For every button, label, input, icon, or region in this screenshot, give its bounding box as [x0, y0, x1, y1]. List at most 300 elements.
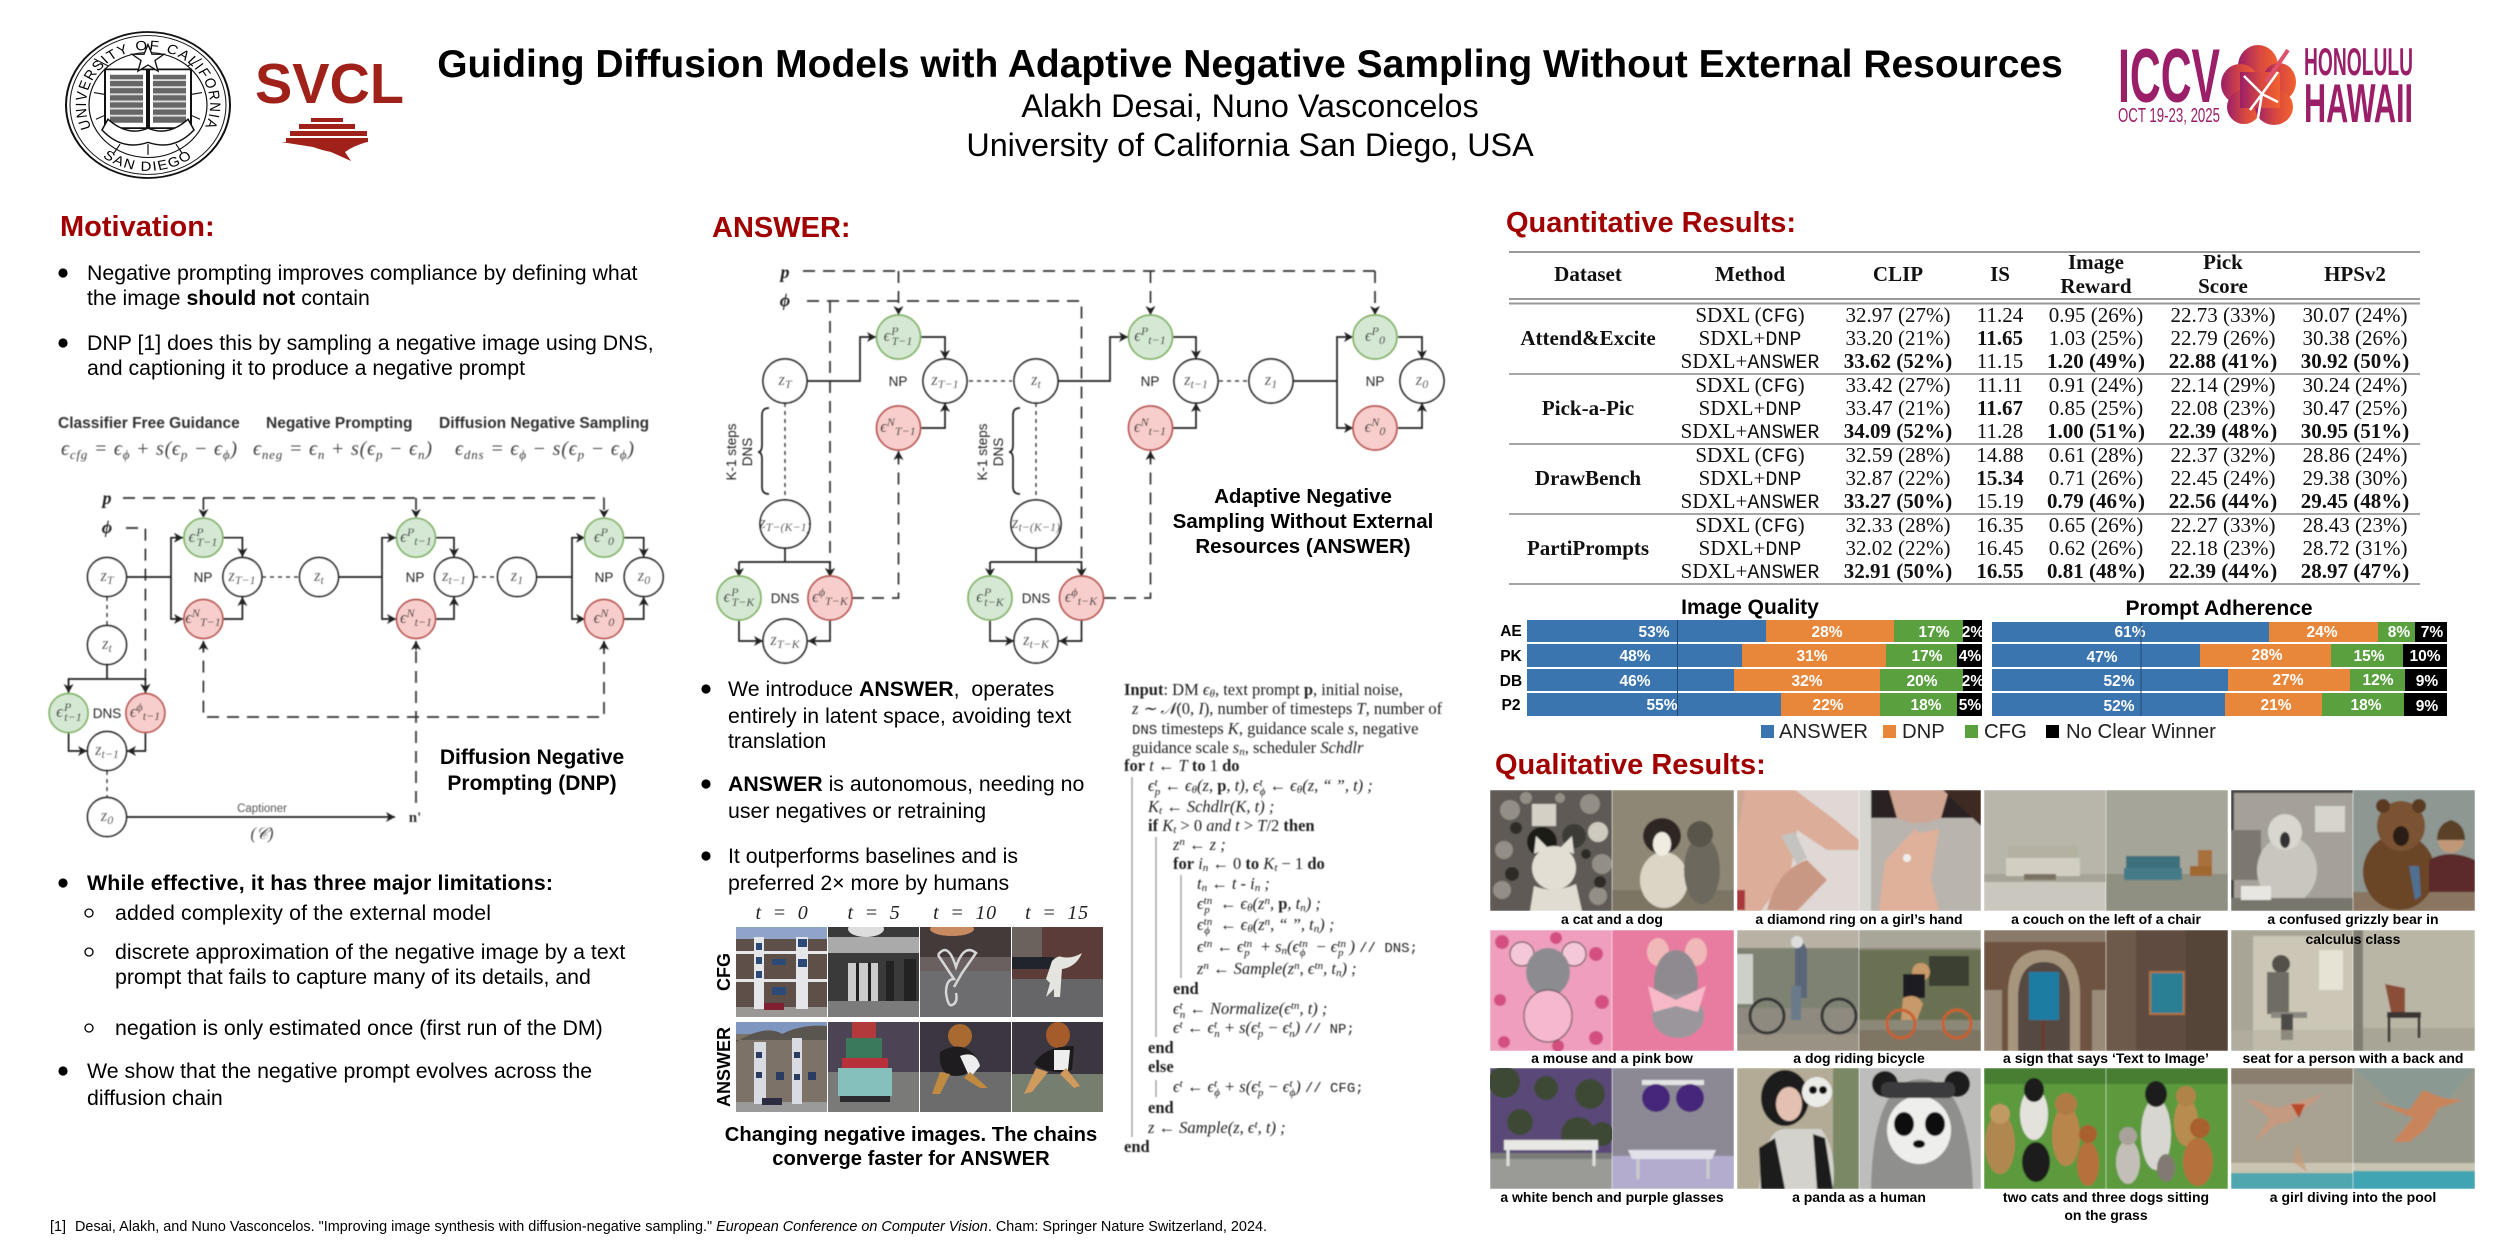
equations: guidance formulas: Classifier Free Guidance	[58, 415, 240, 432]
table group: Attend&Excite: 22.73 (33%)	[2171, 303, 2275, 327]
algorithm: ANSWER pseudocode: ϕ	[1204, 925, 1210, 937]
table header: Method	[1715, 262, 1785, 286]
row PK: 10%	[2409, 648, 2441, 665]
heading: Motivation: Motivation:	[60, 211, 215, 243]
diagram: ANSWER chain: z	[1031, 370, 1038, 389]
algorithm: ANSWER pseudocode: z	[1197, 959, 1203, 978]
text block: limitations bullets: We show that the negative prompt evolves across the	[87, 1059, 592, 1083]
diagram: ANSWER chain: DNS	[1022, 591, 1050, 606]
diagram: Diffusion Negative Prompting: P	[63, 700, 72, 714]
captions: qualitative images: a diamond ring on a girl’s hand	[1755, 911, 1963, 927]
algorithm: ANSWER pseudocode: end	[1148, 1098, 1174, 1117]
algorithm: ANSWER pseudocode: > 0	[1176, 816, 1206, 835]
row P2: 21%	[2260, 697, 2292, 714]
algorithm: ANSWER pseudocode: t	[1274, 862, 1278, 874]
table header: IS	[1990, 262, 2010, 286]
algorithm: ANSWER pseudocode: n	[1336, 967, 1342, 979]
algorithm: ANSWER pseudocode: θ	[1210, 688, 1216, 700]
diagram: Diffusion Negative Prompting: ϵ	[185, 608, 192, 627]
text block: ANSWER bullets: user negatives or retraining	[728, 799, 986, 823]
algorithm: ANSWER pseudocode: ϕ	[1300, 947, 1306, 959]
diagram: Diffusion Negative Prompting: ϵ	[130, 702, 136, 721]
table group: DrawBench: 15.34	[1976, 466, 2024, 490]
algorithm: ANSWER pseudocode: ← ϵ	[1216, 894, 1248, 913]
algorithm: ANSWER pseudocode	[1124, 680, 1443, 1156]
diagram: ANSWER chain: ϵ	[1365, 417, 1371, 436]
logo: UC San Diego seal: UNIVERSITY OF CALIFORNIA	[76, 40, 220, 130]
heading: Qualitative Results: Qualitative Results:	[1495, 749, 1766, 781]
table group: Attend&Excite: 22.79 (26%)	[2171, 326, 2275, 350]
algorithm: ANSWER pseudocode: (z,	[1197, 776, 1217, 795]
text block: motivation bullets top: the image should not contain	[87, 286, 370, 310]
algorithm: ANSWER pseudocode: tn	[1291, 1000, 1300, 1012]
captions: qualitative images: on the grass	[2064, 1207, 2148, 1223]
equations: guidance formulas: − ϵ	[585, 438, 620, 460]
text block: ANSWER bullets: ANSWER is autonomous, needing no	[728, 772, 1084, 796]
table group: PartiPrompts: 0.62 (26%)	[2049, 536, 2143, 560]
algorithm: ANSWER pseudocode: ϵ	[1197, 915, 1204, 934]
equations: guidance formulas: cfg	[70, 447, 88, 462]
text block: motivation bullets top: and captioning it to produce a negative prompt	[87, 356, 525, 380]
table group: PartiPrompts	[1527, 513, 2409, 585]
algorithm: ANSWER pseudocode: , t) ;	[1258, 1118, 1286, 1137]
algorithm: ANSWER pseudocode: t	[1258, 1078, 1262, 1090]
table group: Attend&Excite: 11.24	[1977, 303, 2024, 327]
algorithm: ANSWER pseudocode: ← 0	[1208, 854, 1245, 873]
algorithm: ANSWER pseudocode: n	[1179, 836, 1185, 848]
text block: ANSWER bullets: It outperforms baselines and is	[728, 844, 1018, 868]
row DB: 20%	[1906, 673, 1938, 690]
icon: SVCL ship	[281, 118, 368, 161]
algorithm: ANSWER pseudocode: z ← Sample(z, ϵ	[1148, 1118, 1255, 1137]
algorithm: ANSWER pseudocode: ← Normalize(ϵ	[1185, 999, 1292, 1018]
table group: Attend&Excite: SDXL (CFG)	[1695, 303, 1805, 329]
diagram: Diffusion Negative Prompting: t	[109, 641, 113, 655]
captions: qualitative images	[1500, 911, 2463, 1223]
text block: limitations bullets: diffusion chain	[87, 1086, 223, 1110]
legend: No Clear Winner	[2066, 721, 2216, 743]
table group: PartiPrompts: 16.55	[1976, 559, 2024, 583]
table group: Pick-a-Pic: 22.14 (29%)	[2171, 373, 2275, 397]
table group: PartiPrompts: PartiPrompts	[1527, 536, 1649, 560]
algorithm: ANSWER pseudocode: − ϵ	[1311, 937, 1339, 956]
row P2: 9%	[2416, 698, 2438, 715]
logo: ICCV Honolulu Hawaii: HAWAII	[2304, 72, 2413, 134]
image: CFG t=10	[920, 927, 1011, 1017]
algorithm: ANSWER pseudocode: tn	[1244, 938, 1253, 950]
table group: Pick-a-Pic: 30.47 (25%)	[2303, 396, 2407, 420]
algorithm: ANSWER pseudocode: p	[1203, 904, 1210, 916]
text block: limitations bullets	[58, 871, 625, 1110]
row P2: 55%	[1646, 697, 1678, 714]
diagram: ANSWER chain: P	[890, 324, 899, 338]
algorithm: ANSWER pseudocode: (ϵ	[1287, 937, 1300, 956]
equations: guidance formulas: + s(ϵ	[130, 438, 181, 460]
algorithm: ANSWER pseudocode: t	[1214, 1019, 1218, 1031]
table group: PartiPrompts: 22.18 (23%)	[2171, 536, 2275, 560]
algorithm: ANSWER pseudocode: , t) ;	[1299, 999, 1327, 1018]
algorithm: ANSWER pseudocode: tn	[1204, 916, 1213, 928]
diagram: Diffusion Negative Prompting: t−1	[448, 573, 466, 587]
algorithm: ANSWER pseudocode: n	[1203, 960, 1209, 972]
table group: DrawBench: SDXL+DNP	[1699, 466, 1801, 492]
algorithm: ANSWER pseudocode: tn	[1315, 960, 1324, 972]
algorithm: ANSWER pseudocode: // DNS;	[1359, 941, 1418, 957]
table group: DrawBench: SDXL+ANSWER	[1681, 489, 1819, 515]
algorithm: ANSWER pseudocode: n	[1202, 882, 1208, 894]
algorithm: ANSWER pseudocode: t	[1173, 824, 1177, 836]
labels: timesteps	[755, 902, 1089, 924]
diagram: ANSWER chain: P	[1371, 324, 1380, 338]
row AE: 53%	[1638, 624, 1670, 641]
algorithm: ANSWER pseudocode: n	[1203, 862, 1209, 874]
diagram: ANSWER chain: NP	[889, 374, 907, 389]
heading: Quantitative Results: Quantitative Results:	[1506, 207, 1796, 239]
equations: guidance formulas: dns	[464, 447, 484, 462]
row AE	[1527, 620, 1984, 642]
text block: motivation bullets top: Negative prompting improves compliance by defining what	[87, 261, 638, 285]
algorithm: ANSWER pseudocode: t	[1180, 1019, 1184, 1031]
image: a cat and a dog	[1490, 790, 1734, 911]
table group: Attend&Excite: 0.95 (26%)	[2049, 303, 2143, 327]
equations: guidance formulas	[58, 415, 649, 462]
table group: PartiPrompts: 32.33 (28%)	[1846, 513, 1950, 537]
row PK	[1992, 644, 2447, 667]
diagram: ANSWER chain: 0	[1379, 333, 1385, 347]
diagram: ANSWER chain: N	[1140, 415, 1150, 429]
equations: guidance formulas: − ϵ	[383, 438, 418, 460]
table group: PartiPrompts: 28.72 (31%)	[2303, 536, 2407, 560]
table group: PartiPrompts: 28.43 (23%)	[2303, 513, 2407, 537]
logo: ICCV Honolulu Hawaii	[2118, 34, 2413, 134]
diagram: ANSWER chain: z	[1012, 513, 1018, 532]
image: seat for a person with a back and	[2231, 930, 2475, 1051]
image: a girl diving into the pool	[2231, 1068, 2475, 1189]
table group: DrawBench: SDXL (CFG)	[1695, 443, 1805, 469]
algorithm: ANSWER pseudocode: end	[1124, 1137, 1150, 1156]
algorithm: ANSWER pseudocode: Schdlr	[1320, 738, 1364, 757]
image: a confused grizzly bear in calculus class	[2231, 790, 2475, 911]
diagram: Diffusion Negative Prompting: ϵ	[400, 608, 407, 627]
algorithm: ANSWER pseudocode: p	[1257, 1028, 1264, 1040]
row DB: 32%	[1791, 673, 1823, 690]
text block: limitations bullets: negation is only estimated once (first run of the DM)	[115, 1016, 603, 1040]
algorithm: ANSWER pseudocode: θ	[1247, 902, 1253, 914]
algorithm: ANSWER pseudocode: − 1	[1277, 854, 1307, 873]
diagram: Diffusion Negative Prompting: NP	[406, 570, 424, 585]
table group: PartiPrompts: 22.39 (44%)	[2169, 559, 2277, 583]
diagram: ANSWER chain: z	[1023, 630, 1029, 649]
diagram: Diffusion Negative Prompting: 0	[644, 573, 650, 587]
table group: DrawBench: 22.37 (32%)	[2171, 443, 2275, 467]
row PK: 31%	[1796, 648, 1828, 665]
diagram: ANSWER chain: t−1	[1149, 424, 1166, 438]
equations: guidance formulas: ϕ	[123, 447, 130, 462]
row AE: 24%	[2306, 624, 2338, 641]
diagram: Diffusion Negative Prompting: P	[600, 525, 609, 539]
row AE: 2%	[1962, 624, 1984, 641]
row AE: 17%	[1918, 624, 1950, 641]
algorithm: ANSWER pseudocode: , “ ”, t	[1270, 915, 1314, 934]
chart: Prompt Adherence stacked bars	[1992, 597, 2447, 716]
algorithm: ANSWER pseudocode: n	[1300, 902, 1306, 914]
diagram: ANSWER chain: DNS	[991, 438, 1006, 466]
diagram: Diffusion Negative Prompting: t−1	[415, 615, 432, 629]
table group: DrawBench: 0.71 (26%)	[2049, 466, 2143, 490]
diagram: Diffusion Negative Prompting: 0	[608, 615, 614, 629]
diagram: Diffusion Negative Prompting: 1	[517, 573, 523, 587]
equations: guidance formulas: = ϵ	[484, 438, 519, 460]
table group: Pick-a-Pic: Pick-a-Pic	[1542, 396, 1634, 420]
diagram: ANSWER chain: NP	[1141, 374, 1159, 389]
icon: hibiscus flower	[2221, 45, 2296, 125]
diagram: ANSWER chain: K-1 steps	[975, 423, 990, 481]
diagram: Diffusion Negative Prompting: T−1	[197, 535, 217, 549]
equations: guidance formulas: p	[180, 447, 188, 462]
algorithm: ANSWER pseudocode: for t ← T to 1 do	[1124, 756, 1240, 775]
icon: brace right	[1009, 408, 1020, 494]
table group: DrawBench: 29.38 (30%)	[2303, 466, 2407, 490]
diagram: ANSWER chain: ϵ	[884, 326, 890, 345]
row PK: 4%	[1959, 648, 1981, 665]
logo: SVCL	[255, 52, 404, 161]
algorithm: ANSWER pseudocode: ← t - i	[1207, 874, 1255, 893]
diagram: Diffusion Negative Prompting: N	[191, 606, 201, 620]
algorithm: ANSWER pseudocode: t	[1260, 777, 1264, 789]
diagram: Diffusion Negative Prompting: T	[107, 573, 115, 587]
algorithm: ANSWER pseudocode: n	[1214, 1028, 1220, 1040]
table group: Pick-a-Pic: SDXL+ANSWER	[1681, 419, 1819, 445]
diagram: ANSWER chain: ϵ	[1065, 587, 1072, 606]
algorithm: ANSWER pseudocode: tn	[1204, 938, 1213, 950]
diagram: Diffusion Negative Prompting: Captioner	[237, 803, 287, 815]
algorithm: ANSWER pseudocode: , scheduler	[1245, 738, 1320, 757]
table group: Attend&Excite: 11.15	[1977, 349, 2023, 373]
diagram: ANSWER chain: t	[1038, 377, 1042, 391]
diagram: ANSWER chain: T−K	[777, 637, 801, 651]
algorithm: ANSWER pseudocode: ϕ	[1214, 1087, 1220, 1099]
category labels: AE	[1500, 623, 1522, 640]
diagram: Diffusion Negative Prompting: 0	[107, 813, 113, 827]
labels: timesteps: t = 10	[933, 902, 997, 924]
algorithm: ANSWER pseudocode: z ∼ 𝒩(0, I), number of timesteps T, number of	[1131, 699, 1443, 718]
algorithm: ANSWER pseudocode: p, t	[1278, 894, 1300, 913]
diagram: ANSWER chain: P	[983, 585, 992, 599]
diagram: Diffusion Negative Prompting: t	[321, 573, 325, 587]
diagram: Diffusion Negative Prompting: ϵ	[594, 608, 600, 627]
row P2: 18%	[1910, 697, 1942, 714]
diagram: Diffusion Negative Prompting: N	[406, 606, 416, 620]
table group: Pick-a-Pic: 22.08 (23%)	[2171, 396, 2275, 420]
diagram: ANSWER chain: P	[730, 585, 739, 599]
algorithm: ANSWER pseudocode: + s	[1256, 937, 1282, 956]
legend	[1761, 721, 2216, 743]
algorithm: ANSWER pseudocode: if K	[1148, 816, 1173, 835]
image: ANSWER t=15	[1012, 1022, 1103, 1112]
diagram: Diffusion Negative Prompting: z	[511, 566, 517, 585]
algorithm: ANSWER pseudocode: ← z ;	[1185, 835, 1226, 854]
algorithm: ANSWER pseudocode: ,	[1270, 894, 1278, 913]
algorithm: ANSWER pseudocode: ) ;	[1305, 894, 1321, 913]
image: a diamond ring on a girl's hand	[1737, 790, 1981, 911]
diagram: ANSWER chain: z	[1184, 370, 1190, 389]
image: a mouse and a pink bow	[1490, 930, 1734, 1052]
table group: Pick-a-Pic: 30.95 (51%)	[2301, 419, 2409, 443]
algorithm: ANSWER pseudocode: n	[1314, 923, 1320, 935]
diagram: ANSWER chain: t−1	[1148, 333, 1166, 347]
algorithm: ANSWER pseudocode: − ϵ	[1263, 1077, 1291, 1096]
caption: Diffusion Negative Prompting: Diffusion Negative	[440, 746, 624, 769]
diagram: ANSWER chain: T−K	[825, 594, 849, 608]
text block: ANSWER bullets	[701, 677, 1084, 895]
image grid: qualitative results	[1488, 790, 2475, 1223]
diagram: ANSWER chain: ϵ	[1365, 326, 1372, 345]
row DB: 27%	[2272, 672, 2304, 689]
equations: guidance formulas: = ϵ	[283, 438, 318, 460]
diagram: Diffusion Negative Prompting: ϵ	[56, 702, 63, 721]
table header: CLIP	[1873, 262, 1923, 286]
chart: Image Quality stacked bars	[1500, 596, 1984, 716]
algorithm: ANSWER pseudocode: ← Schdlr(K, t) ;	[1162, 797, 1274, 816]
row PK	[1527, 644, 1982, 667]
chart title: Image Quality	[1681, 596, 1819, 619]
diagram: Diffusion Negative Prompting: p	[100, 488, 112, 508]
diagram: Diffusion Negative Prompting: z	[95, 740, 101, 759]
image: a panda as a human	[1737, 1068, 1981, 1189]
table group: Attend&Excite: 11.65	[1977, 326, 2023, 350]
diagram: ANSWER chain: t−(K−1)	[1018, 520, 1060, 534]
legend: CFG	[1984, 721, 2027, 743]
diagram: Diffusion Negative Prompting: P	[195, 525, 204, 539]
equations: guidance formulas: p	[577, 447, 585, 462]
equations: guidance formulas: ϕ	[223, 447, 230, 462]
table header: Pick	[2203, 250, 2243, 274]
category labels: PK	[1500, 648, 1523, 665]
algorithm: ANSWER pseudocode: p	[1337, 947, 1344, 959]
algorithm: ANSWER pseudocode: ϕ	[1290, 1087, 1296, 1099]
table group: Pick-a-Pic	[1542, 373, 2409, 445]
captions: qualitative images: a couch on the left of a chair	[2011, 911, 2201, 927]
text block: ANSWER bullets: translation	[728, 729, 826, 753]
algorithm: ANSWER pseudocode: p	[1243, 947, 1250, 959]
image: CFG t=15	[1012, 927, 1103, 1017]
diagram: Diffusion Negative Prompting: NP	[194, 570, 212, 585]
image: CFG t=0	[736, 927, 827, 1017]
table group: DrawBench: DrawBench	[1535, 466, 1641, 490]
captions: qualitative images: a white bench and purple glasses	[1500, 1189, 1724, 1205]
table header: Image	[2068, 250, 2124, 274]
image: ANSWER t=5	[828, 1022, 919, 1112]
equations: guidance formulas: )	[626, 438, 634, 460]
table group: Attend&Excite: 30.38 (26%)	[2303, 326, 2407, 350]
diagram: ANSWER chain: ϵ	[880, 417, 887, 436]
algorithm: ANSWER pseudocode: t	[1289, 1078, 1293, 1090]
algorithm: ANSWER pseudocode: − ϵ	[1263, 1018, 1291, 1037]
table group: DrawBench: 29.45 (48%)	[2301, 489, 2409, 513]
diagram: ANSWER chain: DNS	[771, 591, 799, 606]
algorithm: ANSWER pseudocode: t	[1255, 1119, 1259, 1131]
text block: limitations bullets: discrete approximation of the negative image by a text	[115, 940, 625, 964]
text block: motivation bullets top	[58, 261, 654, 380]
diagram: Diffusion Negative Prompting: z	[102, 634, 109, 653]
algorithm: ANSWER pseudocode: z	[1173, 835, 1179, 854]
table group: Attend&Excite: 33.62 (52%)	[1844, 349, 1952, 373]
algorithm: ANSWER pseudocode: ← ϵ	[1160, 776, 1193, 795]
algorithm: ANSWER pseudocode: )	[1294, 1077, 1305, 1096]
diagram: Diffusion Negative Prompting: t−1	[414, 534, 432, 548]
algorithm: ANSWER pseudocode: p, initial noise,	[1304, 680, 1403, 699]
diagram: ANSWER chain: T	[785, 377, 793, 391]
logo: ICCV Honolulu Hawaii: OCT 19-23, 2025	[2118, 105, 2220, 127]
algorithm: ANSWER pseudocode: t	[1258, 1019, 1262, 1031]
diagram: ANSWER chain: T−(K−1)	[766, 520, 811, 534]
algorithm: ANSWER pseudocode: n	[1180, 1009, 1186, 1021]
table group: DrawBench: 28.86 (24%)	[2303, 443, 2407, 467]
caption: Diffusion Negative Prompting: Prompting (DNP)	[447, 772, 617, 795]
legend: ANSWER	[1779, 721, 1868, 743]
algorithm: ANSWER pseudocode: θ	[1247, 923, 1253, 935]
algorithm: ANSWER pseudocode: t	[1289, 1019, 1293, 1031]
table group: PartiPrompts: 0.65 (26%)	[2049, 513, 2143, 537]
diagram: ANSWER chain: ϵ	[812, 587, 819, 606]
algorithm: ANSWER pseudocode: ← ϵ	[1183, 1077, 1215, 1096]
equations: guidance formulas: − s(ϵ	[527, 438, 578, 460]
table group: Pick-a-Pic: 30.24 (24%)	[2303, 373, 2407, 397]
category labels: DB	[1500, 673, 1522, 690]
algorithm: ANSWER pseudocode: (z	[1253, 894, 1265, 913]
caption: negative images: Changing negative images. The chains	[725, 1124, 1097, 1146]
diagram: ANSWER chain: N	[1370, 415, 1380, 429]
category labels	[1500, 623, 1523, 714]
diagram: ANSWER chain: z	[778, 370, 785, 389]
algorithm: ANSWER pseudocode: ) ;	[1340, 959, 1357, 978]
equations: guidance formulas: n	[418, 447, 425, 462]
row AE: 8%	[2388, 624, 2410, 641]
algorithm: ANSWER pseudocode: ϵ	[1197, 894, 1204, 913]
text block: ANSWER bullets: entirely in latent space, avoiding text	[728, 704, 1071, 728]
caption: Diffusion Negative Prompting	[440, 746, 624, 795]
table header	[1554, 250, 2386, 298]
diagram: ANSWER chain: ϵ	[976, 587, 983, 606]
title block	[437, 43, 2063, 163]
algorithm: ANSWER pseudocode: t	[1155, 777, 1159, 789]
diagram: Diffusion Negative Prompting: T−1	[200, 615, 221, 629]
algorithm: ANSWER pseudocode: θ	[1192, 784, 1198, 796]
diagram: Diffusion Negative Prompting: P	[406, 525, 415, 539]
table group: Attend&Excite: 30.07 (24%)	[2303, 303, 2407, 327]
equations: guidance formulas: )	[229, 438, 237, 460]
diagram: Diffusion Negative Prompting: z	[228, 566, 235, 585]
diagram: ANSWER chain: ϕ	[819, 585, 825, 599]
row P2: 52%	[2103, 698, 2135, 715]
algorithm: ANSWER pseudocode: tn	[1204, 895, 1213, 907]
algorithm: ANSWER pseudocode: (z, “ ”, t) ;	[1302, 776, 1373, 795]
equations: guidance formulas: − ϵ	[188, 438, 223, 460]
table group: Attend&Excite: 1.03 (25%)	[2049, 326, 2143, 350]
labels: timesteps: t = 0	[755, 902, 809, 924]
table group: PartiPrompts: 0.81 (48%)	[2047, 559, 2145, 583]
equations: guidance formulas: n	[318, 447, 324, 462]
algorithm: ANSWER pseudocode: // CFG;	[1305, 1081, 1364, 1097]
category labels: P2	[1502, 697, 1520, 714]
algorithm: ANSWER pseudocode: tn	[1299, 938, 1308, 950]
table group: PartiPrompts: 16.35	[1976, 513, 2024, 537]
table group: Attend&Excite: 33.20 (21%)	[1846, 326, 1950, 350]
diagram: ANSWER chain: T−1	[895, 424, 916, 438]
row DB: 2%	[1962, 673, 1984, 690]
algorithm: ANSWER pseudocode: guidance scale s	[1132, 738, 1239, 757]
algorithm: ANSWER pseudocode: ϵ	[1173, 1018, 1180, 1037]
